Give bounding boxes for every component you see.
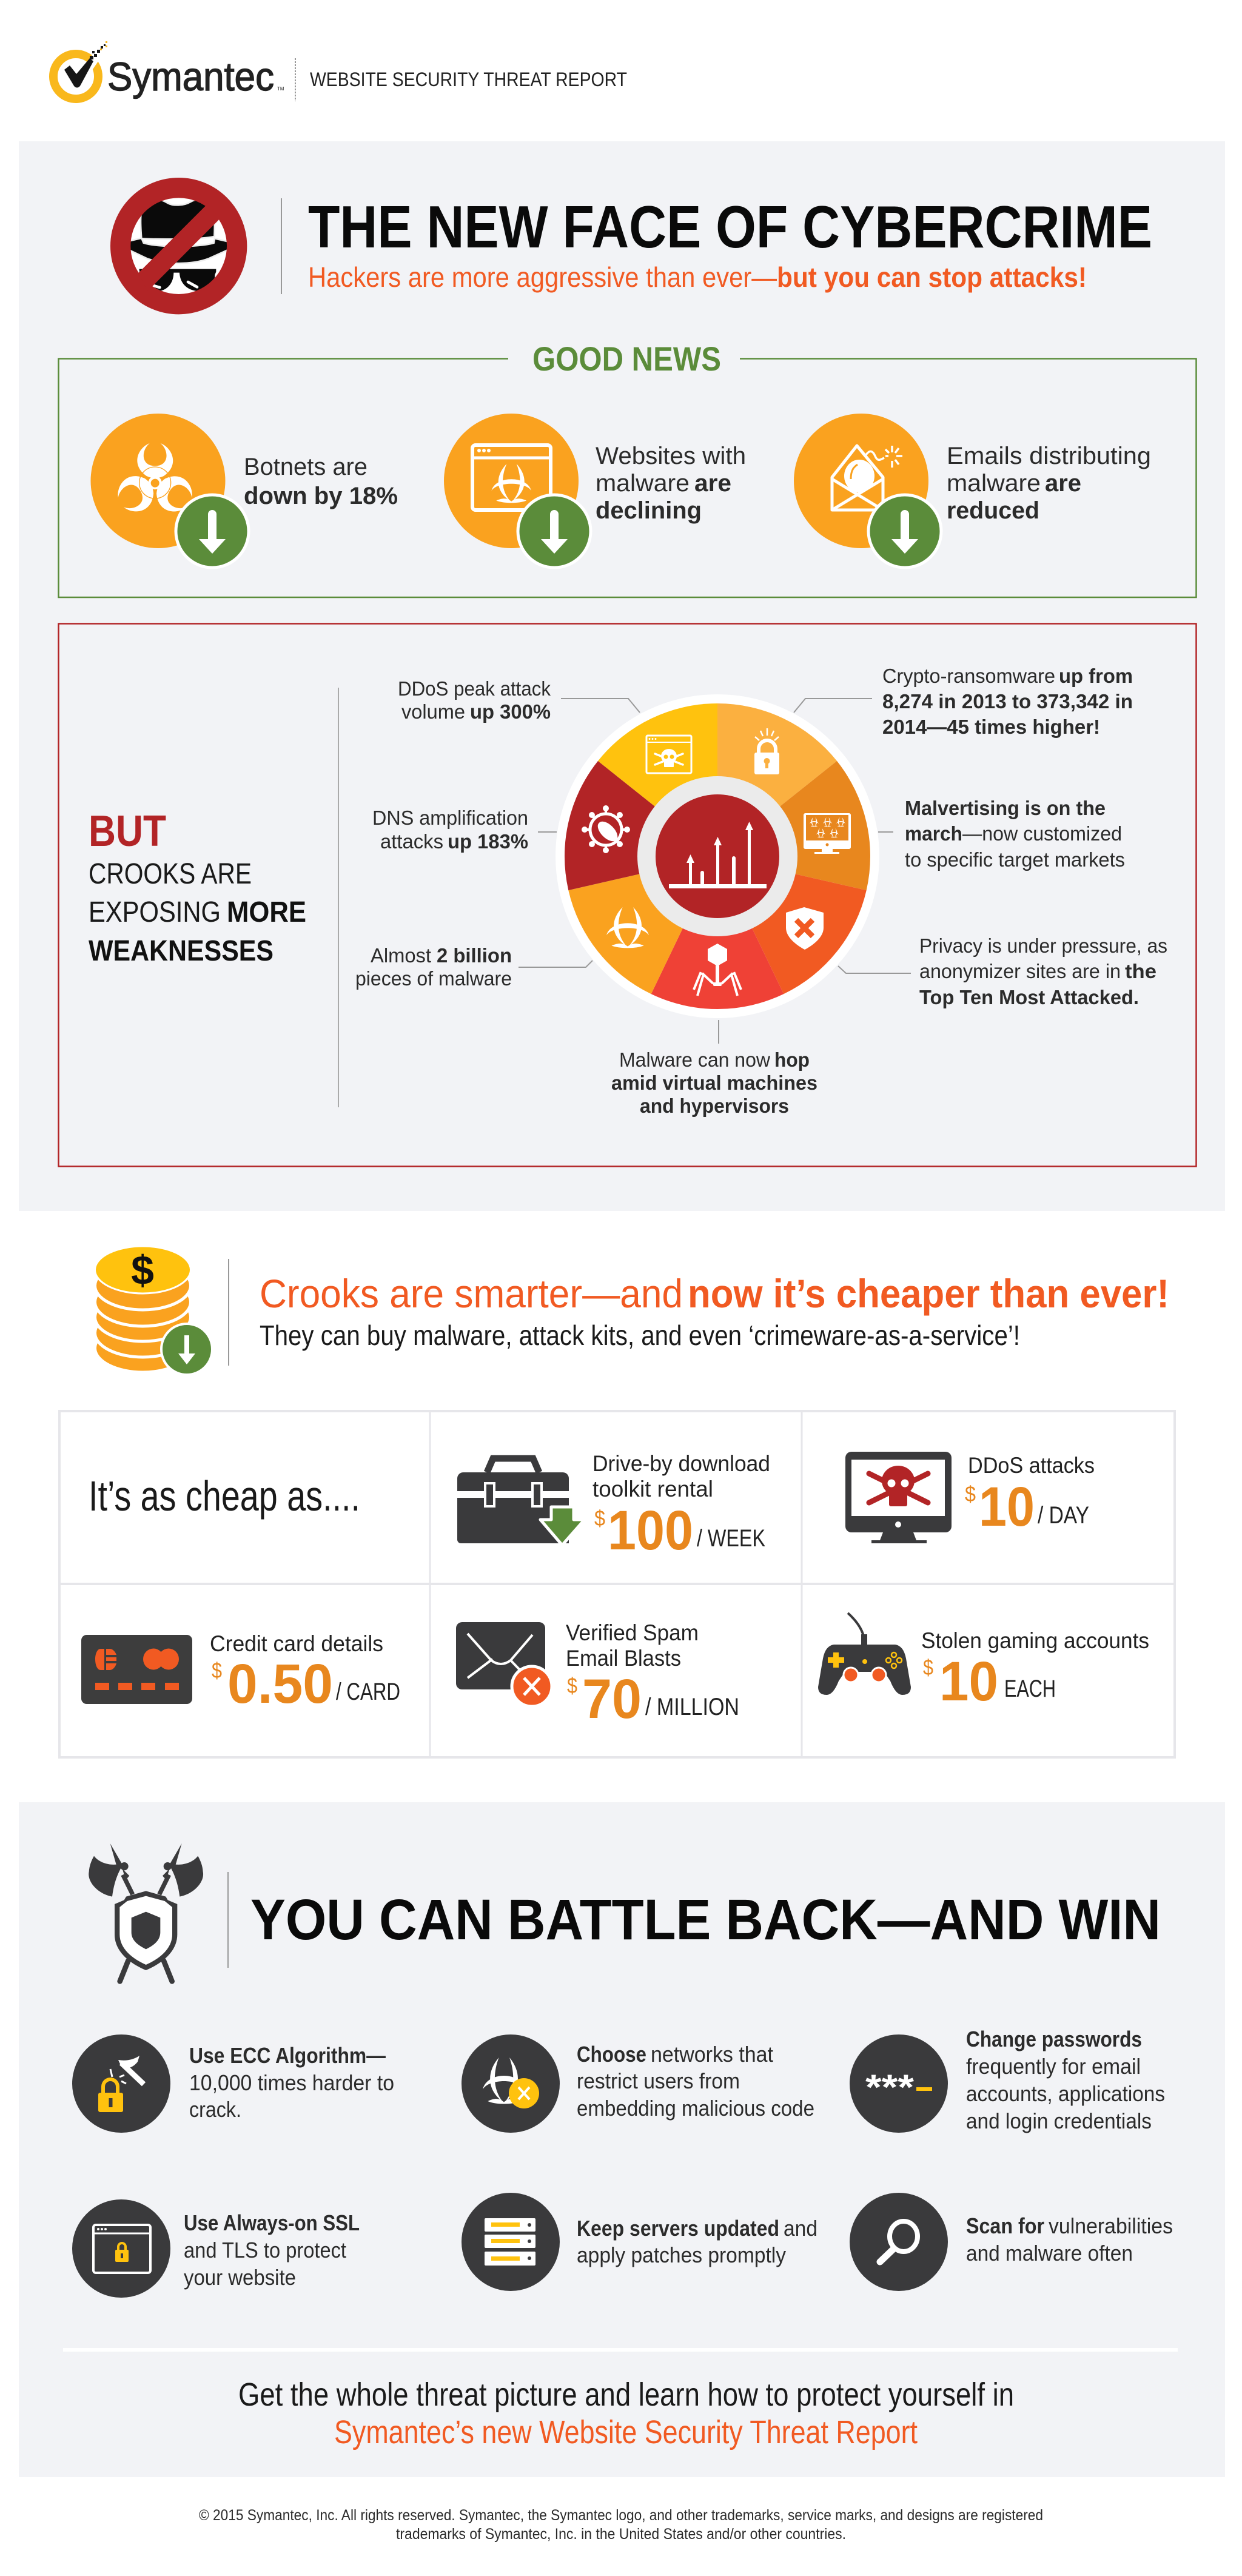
callout: DNS amplification: attacks bbox=[380, 830, 443, 853]
subtitle bbox=[308, 261, 1087, 293]
callout: DNS amplification bbox=[372, 807, 557, 853]
tip: scan for vulnerabilities bbox=[850, 2193, 1173, 2291]
tip: choose networks: Choose bbox=[577, 2042, 646, 2067]
tip: always-on SSL: and TLS to protect bbox=[184, 2238, 346, 2262]
section: cheaper than ever bbox=[95, 1246, 1169, 1375]
cell: stolen gaming accounts: EACH bbox=[1004, 1675, 1056, 1702]
item: botnets: Botnets are bbox=[244, 454, 368, 480]
icon: shield with x bbox=[786, 907, 824, 950]
icon: crossed-out hacker bbox=[118, 188, 237, 304]
tip: ECC algorithm: Use ECC Algorithm— bbox=[189, 2043, 386, 2068]
callout: DNS amplification: DNS amplification bbox=[372, 807, 528, 829]
cell: verified spam email blasts: 70 bbox=[582, 1668, 642, 1730]
subtitle: but you can stop attacks! bbox=[777, 261, 1087, 293]
heading: but crooks are: WEAKNESSES bbox=[89, 935, 274, 967]
callout: hypervisors: and hypervisors bbox=[640, 1095, 789, 1117]
tip: ECC algorithm: 10,000 times harder to bbox=[189, 2070, 394, 2095]
callout: malvertising: —now customized bbox=[962, 822, 1122, 845]
cell: drive-by download bbox=[457, 1451, 770, 1561]
item: emails distributing malware bbox=[794, 414, 1151, 568]
heading: but crooks are bbox=[89, 807, 306, 967]
tip: scan for vulnerabilities: and malware often bbox=[966, 2241, 1133, 2266]
call to action bbox=[238, 2376, 1014, 2450]
callout: malvertising: Malvertising is on the bbox=[905, 797, 1106, 819]
item: emails distributing malware: reduced bbox=[947, 497, 1039, 524]
panel: you can battle back bbox=[19, 1802, 1225, 2477]
item: emails distributing malware: Emails distributing bbox=[947, 443, 1151, 469]
callout: crypto-ransomware: 8,274 in 2013 to 373,342 in bbox=[882, 690, 1133, 713]
item: websites with malware bbox=[444, 414, 746, 568]
tip: keep servers updated: Keep servers updated bbox=[577, 2216, 779, 2241]
callout: privacy: Privacy is under pressure, as bbox=[919, 934, 1167, 957]
chart: threat wheel bbox=[556, 694, 879, 1018]
item: websites with malware: malware bbox=[596, 470, 690, 497]
callout: privacy bbox=[838, 934, 1167, 1008]
report name: WEBSITE SECURITY THREAT REPORT bbox=[310, 69, 627, 90]
tip: change passwords: and login credentials bbox=[966, 2108, 1152, 2133]
cell: credit card details bbox=[81, 1631, 400, 1715]
tip: ECC algorithm bbox=[72, 2034, 394, 2133]
callout: 2 billion pieces: pieces of malware bbox=[355, 967, 512, 990]
callout: privacy: Top Ten Most Attacked. bbox=[919, 986, 1139, 1008]
heading: crooks are smarter: now it’s cheaper than ever! bbox=[688, 1271, 1169, 1316]
item: websites with malware: are bbox=[694, 470, 731, 497]
callout: DDoS: DDoS peak attack bbox=[398, 677, 551, 700]
callout: crypto-ransomware: 2014—45 times higher! bbox=[882, 716, 1100, 738]
tip: choose networks: embedding malicious code bbox=[577, 2096, 814, 2121]
callout: 2 billion pieces: Almost bbox=[371, 944, 431, 967]
call to action: Symantec’s new Website Security Threat Report bbox=[334, 2414, 918, 2450]
icon: window with skull bbox=[646, 736, 691, 773]
callout: hypervisors: hop bbox=[774, 1048, 810, 1071]
cell: verified spam email blasts: $ bbox=[567, 1673, 577, 1698]
tip: keep servers updated bbox=[462, 2193, 817, 2291]
cell: stolen gaming accounts: $ bbox=[923, 1655, 933, 1680]
cell: verified spam email blasts: Verified Spam bbox=[566, 1620, 699, 1645]
callout: crypto-ransomware: up from bbox=[1059, 665, 1133, 687]
item: botnets: down by 18% bbox=[244, 483, 398, 509]
panel: new face of cybercrime bbox=[19, 141, 1225, 1211]
callout: hypervisors: Malware can now bbox=[619, 1048, 770, 1071]
footer: copyright: © 2015 Symantec, Inc. All rights reserved. Symantec, the Symantec logo, and other trademarks, service marks, and designs are registered bbox=[199, 2507, 1043, 2524]
icon: virus phage bbox=[694, 944, 741, 996]
callout: privacy: the bbox=[1125, 960, 1156, 982]
tip: ECC algorithm: crack. bbox=[189, 2097, 241, 2122]
tip: change passwords: accounts, applications bbox=[966, 2081, 1165, 2106]
heading: crooks are smarter: Crooks are smarter—and bbox=[260, 1271, 683, 1316]
callout: hypervisors: amid virtual machines bbox=[611, 1072, 817, 1094]
tip: always-on SSL: Use Always-on SSL bbox=[184, 2210, 360, 2235]
panel: good news bbox=[58, 340, 1196, 597]
cell: verified spam email blasts: Email Blasts bbox=[566, 1646, 681, 1671]
cell: drive-by download: Drive-by download bbox=[592, 1451, 770, 1476]
cell: credit card details: / CARD bbox=[336, 1679, 400, 1705]
callout: crypto-ransomware bbox=[794, 665, 1133, 738]
panel: but crooks are exposing more weaknesses bbox=[58, 623, 1196, 1167]
tip: choose networks bbox=[462, 2034, 814, 2133]
cell: stolen gaming accounts bbox=[818, 1613, 1149, 1712]
tip: choose networks: networks that bbox=[651, 2042, 773, 2067]
heading: YOU CAN BATTLE BACK—AND WIN bbox=[250, 1888, 1161, 1952]
tip: scan for vulnerabilities: Scan for bbox=[966, 2213, 1044, 2238]
heading: but crooks are: MORE bbox=[227, 896, 306, 928]
callout: hypervisors bbox=[611, 1020, 817, 1117]
callout: 2 billion pieces: 2 billion bbox=[437, 944, 512, 967]
heading: good news: GOOD NEWS bbox=[532, 340, 721, 378]
cell: credit card details: 0.50 bbox=[227, 1653, 333, 1715]
cell: DDoS attacks: / DAY bbox=[1038, 1502, 1089, 1529]
cell: drive-by download: $ bbox=[594, 1506, 605, 1531]
tip: keep servers updated: and bbox=[784, 2216, 817, 2241]
heading: but crooks are: BUT bbox=[89, 807, 166, 856]
tip: change passwords bbox=[850, 2027, 1165, 2133]
cell: stolen gaming accounts: Stolen gaming accounts bbox=[921, 1628, 1149, 1653]
tip: change passwords: frequently for email bbox=[966, 2054, 1141, 2079]
callout: DDoS bbox=[398, 677, 640, 723]
wordmark: Symantec bbox=[107, 54, 274, 99]
cell: drive-by download: 100 bbox=[608, 1500, 693, 1561]
heading: crooks are smarter bbox=[260, 1271, 1169, 1316]
cell: DDoS attacks: DDoS attacks bbox=[968, 1453, 1095, 1478]
footer: copyright: trademarks of Symantec, Inc. in the United States and/or other countries. bbox=[396, 2526, 846, 2543]
callout: DNS amplification: up 183% bbox=[448, 830, 528, 853]
call to action: Get the whole threat picture and learn how to protect yourself in bbox=[238, 2376, 1014, 2413]
tip: always-on SSL bbox=[72, 2199, 360, 2298]
item: emails distributing malware: are bbox=[1045, 470, 1081, 497]
cell: stolen gaming accounts: 10 bbox=[939, 1651, 998, 1712]
price table bbox=[59, 1411, 1176, 1757]
icon: malware symbol bbox=[606, 907, 649, 948]
icon: malvertising monitor bbox=[804, 813, 851, 854]
tip: change passwords: Change passwords bbox=[966, 2027, 1142, 2051]
callout: DDoS: up 300% bbox=[470, 700, 551, 723]
tip: choose networks: restrict users from bbox=[577, 2068, 740, 2093]
callout: 2 billion pieces bbox=[355, 944, 592, 990]
logo mark: yellow ring with check bbox=[53, 41, 107, 99]
callout: malvertising bbox=[878, 797, 1125, 871]
tip: scan for vulnerabilities: vulnerabilities bbox=[1049, 2213, 1173, 2238]
cell: DDoS attacks: 10 bbox=[979, 1476, 1035, 1538]
icon: coin stack bbox=[95, 1246, 212, 1375]
callout: privacy: anonymizer sites are in bbox=[919, 960, 1121, 982]
footer: copyright bbox=[199, 2507, 1043, 2543]
cell: drive-by download: / WEEK bbox=[697, 1525, 765, 1552]
tip: change passwords: *** bbox=[865, 2068, 915, 2107]
cell: credit card details: Credit card details bbox=[210, 1631, 383, 1656]
callout: malvertising: to specific target markets bbox=[905, 848, 1125, 871]
cell: drive-by download: toolkit rental bbox=[592, 1477, 713, 1501]
item: emails distributing malware: malware bbox=[947, 470, 1041, 497]
icon: coin stack: $ bbox=[131, 1247, 154, 1293]
header: Symantec logo and report name bbox=[53, 41, 627, 101]
icon: crossed axes and shield bbox=[89, 1843, 203, 1981]
callout: malvertising: march bbox=[905, 822, 962, 845]
icon: padlock alert bbox=[754, 728, 779, 774]
heading: but crooks are: EXPOSING bbox=[89, 896, 221, 928]
subtitle: Hackers are more aggressive than ever— bbox=[308, 261, 777, 293]
callout: DDoS: volume bbox=[401, 700, 465, 723]
item: botnets bbox=[91, 414, 398, 568]
cell: verified spam email blasts: / MILLION bbox=[645, 1694, 739, 1720]
callout: crypto-ransomware: Crypto-ransomware bbox=[882, 665, 1055, 687]
tip: always-on SSL: your website bbox=[184, 2265, 296, 2290]
item: websites with malware: declining bbox=[596, 497, 702, 524]
icon: germ bbox=[582, 805, 630, 853]
heading: but crooks are: CROOKS ARE bbox=[89, 858, 252, 890]
icon: rising bars bbox=[669, 822, 767, 888]
item: websites with malware: Websites with bbox=[596, 443, 746, 469]
tip: keep servers updated: apply patches promptly bbox=[577, 2242, 786, 2267]
cell: DDoS attacks bbox=[845, 1452, 1095, 1543]
cell: verified spam email blasts bbox=[456, 1620, 739, 1730]
subheading: They can buy malware, attack kits, and even ‘crimeware-as-a-service’! bbox=[260, 1320, 1020, 1351]
cell: credit card details: $ bbox=[212, 1658, 222, 1683]
header: Symantec logo and report name: TM bbox=[277, 86, 284, 92]
cell: DDoS attacks: $ bbox=[965, 1481, 976, 1506]
cell: it's as cheap as: It’s as cheap as.... bbox=[89, 1472, 360, 1520]
